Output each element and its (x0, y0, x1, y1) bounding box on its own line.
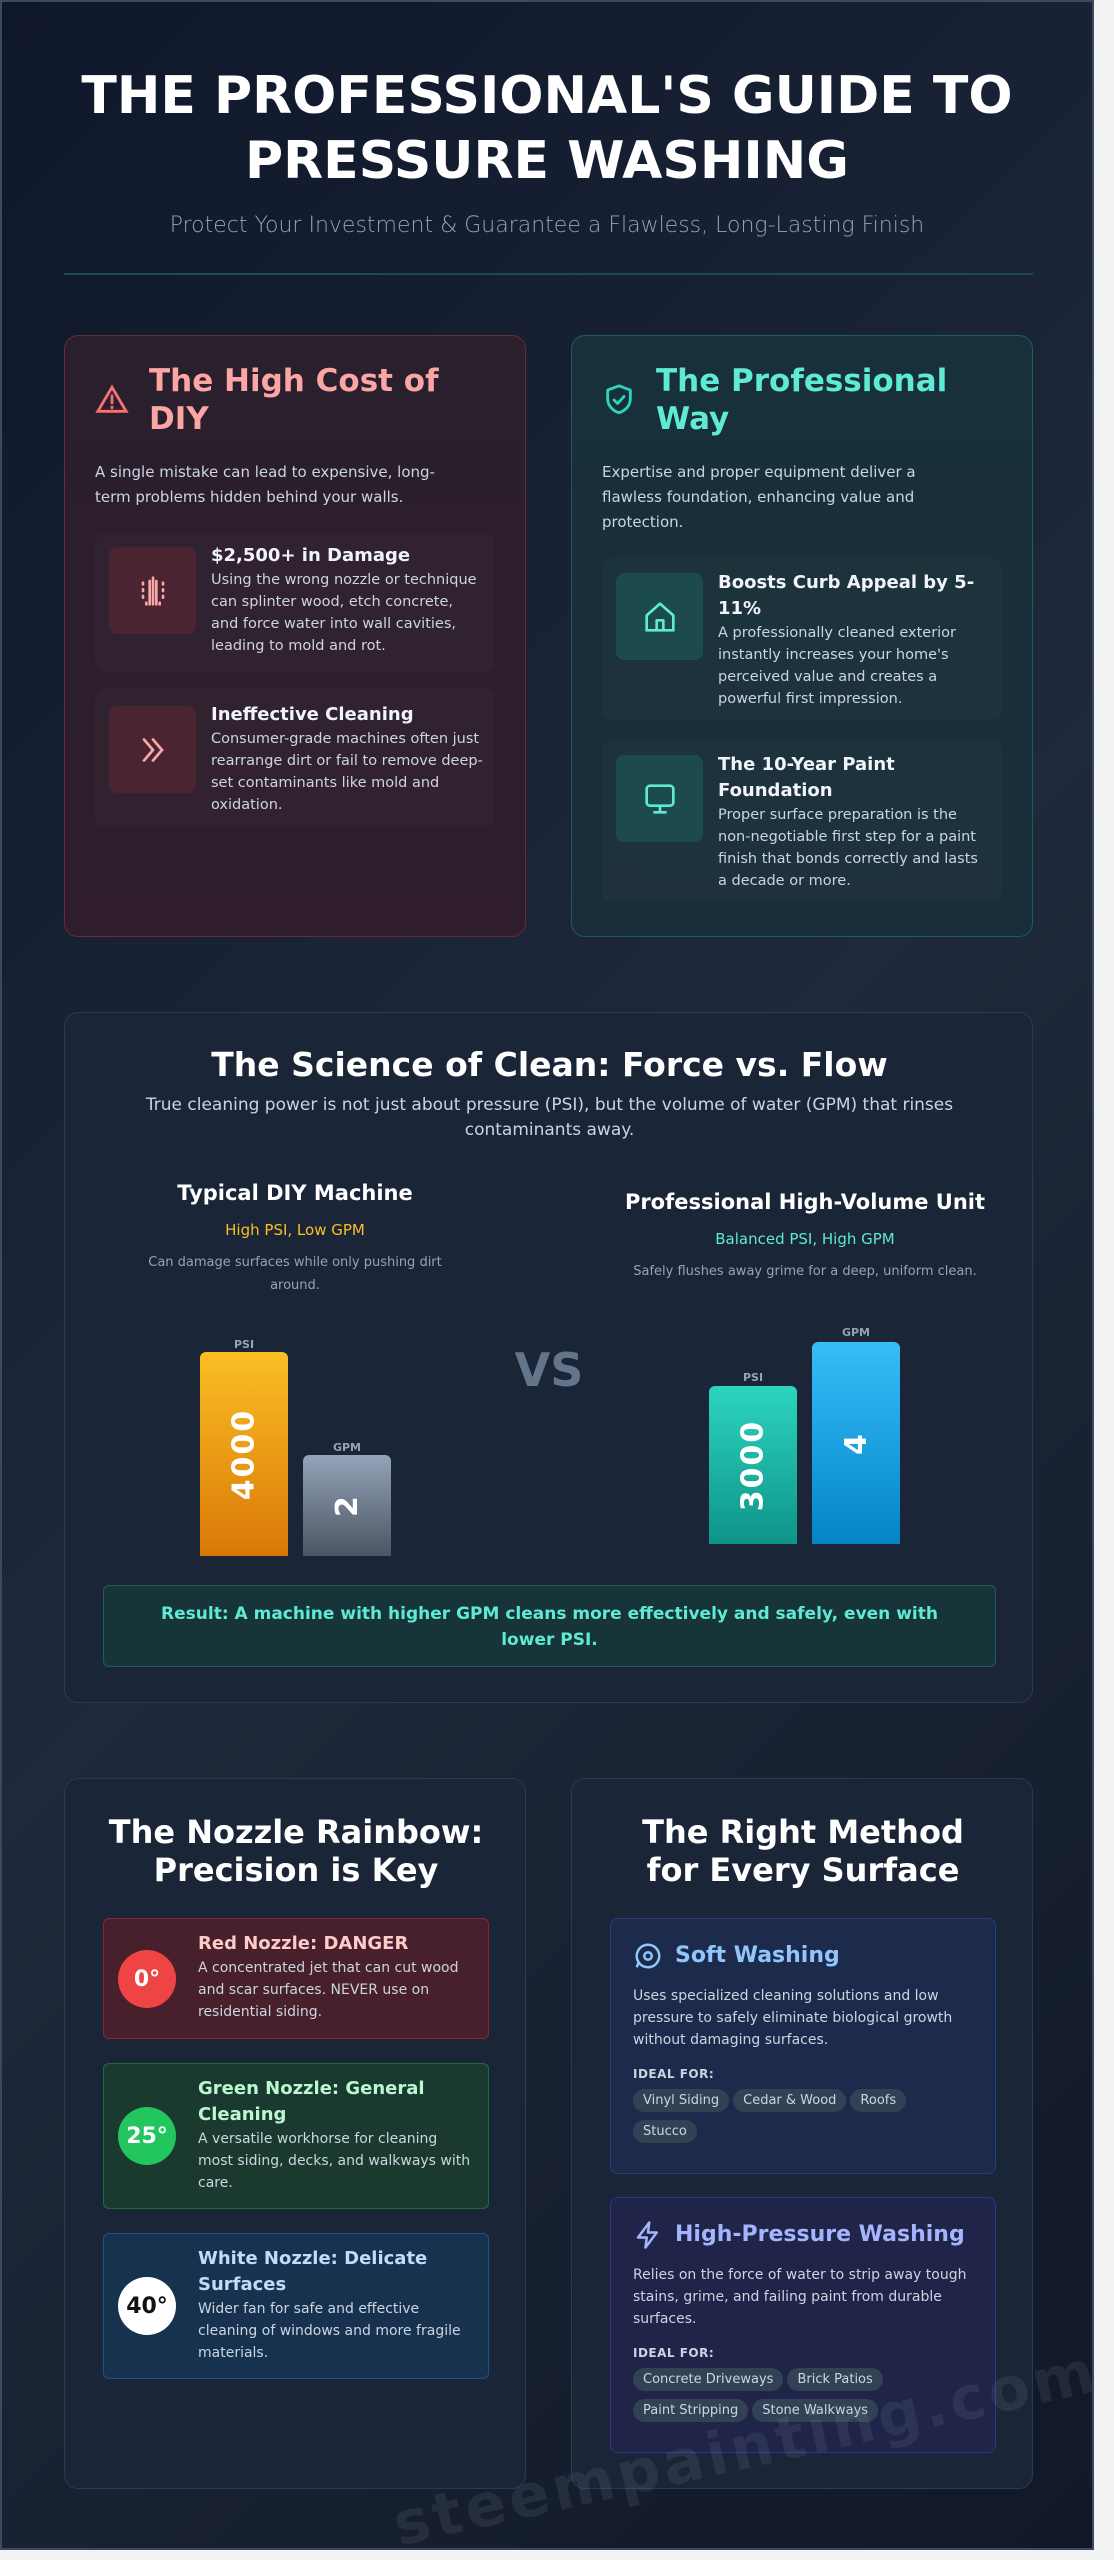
chart: DIY bars: 2 (330, 1494, 364, 1517)
intro text: Expertise and proper equipment deliver a flawless foundation, enhancing value and protection. (602, 463, 916, 531)
nozzle: white (103, 2233, 489, 2379)
method: soft washing (610, 1918, 996, 2174)
chart: pro bars: PSI (743, 1371, 763, 1384)
column: professional unit: Safely flushes away grime for a deep, uniform clean. (633, 1264, 977, 1279)
item: damage (95, 533, 495, 672)
method: soft washing: Roofs (860, 2093, 896, 2108)
method: high-pressure washing: Brick Patios (797, 2372, 873, 2387)
heading: The High Cost of DIY (149, 363, 439, 437)
column: professional unit: Professional High-Volume Unit (625, 1190, 985, 1214)
heading: for Every Surface (647, 1851, 959, 1889)
intro text: A single mistake can lead to expensive, long-term problems hidden behind your walls. (95, 463, 435, 506)
callout: result: Result: A machine with higher GPM cleans more effectively and safely, even with lower PSI. (161, 1604, 938, 1650)
method: high-pressure washing: IDEAL FOR: (633, 2346, 714, 2360)
item: paint foundation (602, 740, 1002, 902)
method: high-pressure washing: Relies on the force of water to strip away tough stains, grime, and failing paint from durable surfaces. (633, 2267, 966, 2327)
column: DIY machine: Typical DIY Machine (177, 1181, 413, 1205)
chart: DIY bars: PSI (234, 1338, 254, 1351)
icon: shield (606, 384, 632, 414)
item: paint foundation: Proper surface preparation is the non-negotiable first step for a paint finish that bonds correctly and lasts a decade or more. (718, 807, 978, 889)
method: high-pressure washing: Stone Walkways (762, 2403, 868, 2418)
chart: pro bars (709, 1326, 900, 1544)
method: soft washing: Vinyl Siding (643, 2093, 719, 2108)
subtitle: True cleaning power is not just about pressure (PSI), but the volume of water (GPM) that rinses contaminants away. (146, 1095, 953, 1140)
nozzle: red: 0° (134, 1966, 160, 1992)
panel: professional way (571, 335, 1033, 937)
heading (642, 1813, 964, 1889)
icon: monitor (616, 755, 703, 842)
method: high-pressure washing (610, 2197, 996, 2453)
chart: DIY bars (200, 1338, 391, 1556)
nozzle: white: White Nozzle: Delicate Surfaces (198, 2248, 427, 2295)
nozzle: green: Green Nozzle: General Cleaning (198, 2078, 425, 2125)
nozzle: green: 25° (126, 2124, 168, 2148)
item: curb appeal: A professionally cleaned exterior instantly increases your home's perceived value and creates a powerful first impression. (718, 625, 956, 707)
VS label: VS (515, 1343, 583, 1397)
chart: pro bars: 3000 (736, 1419, 770, 1511)
item: curb appeal: Boosts Curb Appeal by 5-11% (718, 572, 974, 619)
chart: pro bars: GPM (842, 1326, 870, 1339)
icon: chevrons (109, 706, 196, 793)
heading: The Science of Clean: Force vs. Flow (211, 1045, 888, 1084)
column: DIY machine: Can damage surfaces while only pushing dirt around. (148, 1255, 442, 1293)
method: soft washing: Stucco (643, 2124, 687, 2139)
icon: warning (95, 384, 129, 413)
icon: house (616, 573, 703, 660)
item: ineffective cleaning: Consumer-grade machines often just rearrange dirt or fail to remove deep-set contaminants like mold and oxidation. (211, 731, 483, 813)
item: paint foundation: The 10-Year Paint Foundation (718, 754, 895, 801)
column: DIY machine (148, 1181, 442, 1293)
nozzle: red: Red Nozzle: DANGER (198, 1933, 408, 1954)
heading (108, 1813, 483, 1889)
method: high-pressure washing: High-Pressure Washing (675, 2222, 965, 2247)
method: soft washing: Soft Washing (675, 1943, 840, 1968)
callout: result (103, 1585, 996, 1667)
chart: DIY bars: 4000 (226, 1408, 262, 1500)
nozzle: white: 40° (126, 2294, 168, 2318)
nozzle: red: A concentrated jet that can cut wood and scar surfaces. NEVER use on residential siding. (198, 1960, 459, 2020)
title: PRESSURE WASHING (245, 131, 849, 191)
column: professional unit: Balanced PSI, High GPM (715, 1230, 895, 1248)
subtitle: Protect Your Investment & Guarantee a Flawless, Long-Lasting Finish (170, 213, 924, 238)
panel: nozzle rainbow (64, 1778, 526, 2489)
column: DIY machine: High PSI, Low GPM (225, 1221, 365, 1239)
nozzle: white: Wider fan for safe and effective cleaning of windows and more fragile materials. (198, 2301, 461, 2361)
heading: The Nozzle Rainbow: (109, 1813, 483, 1851)
method: high-pressure washing: Concrete Driveways (643, 2372, 773, 2387)
item: ineffective cleaning (95, 688, 495, 827)
chart: pro bars: 4 (838, 1432, 874, 1454)
item: damage: Using the wrong nozzle or technique can splinter wood, etch concrete, and force water into wall cavities, leading to mold and rot. (211, 572, 477, 654)
heading: The Right Method (642, 1813, 964, 1851)
title (81, 66, 1013, 191)
nozzle: red (103, 1918, 489, 2039)
method: soft washing: Uses specialized cleaning solutions and low pressure to safely eliminate biological growth without damaging surfaces. (633, 1988, 952, 2048)
item: damage: $2,500+ in Damage (211, 545, 410, 566)
column: professional unit (625, 1190, 985, 1279)
method: soft washing: IDEAL FOR: (633, 2067, 714, 2081)
item: curb appeal (602, 558, 1002, 720)
item: ineffective cleaning: Ineffective Cleaning (211, 704, 414, 725)
panel: right method (571, 1778, 1033, 2489)
chart: DIY bars: GPM (333, 1441, 361, 1454)
method: high-pressure washing: Paint Stripping (643, 2403, 738, 2418)
nozzle: green (103, 2063, 489, 2209)
heading: Precision is Key (154, 1851, 438, 1889)
icon: spray (109, 547, 196, 634)
title: THE PROFESSIONAL'S GUIDE TO (81, 66, 1013, 126)
heading: The Professional Way (656, 363, 947, 437)
method: soft washing: Cedar & Wood (743, 2093, 836, 2108)
panel: science of clean (64, 1012, 1033, 1703)
panel: high cost of DIY (64, 335, 526, 937)
nozzle: green: A versatile workhorse for cleaning most siding, decks, and walkways with care. (198, 2131, 470, 2191)
